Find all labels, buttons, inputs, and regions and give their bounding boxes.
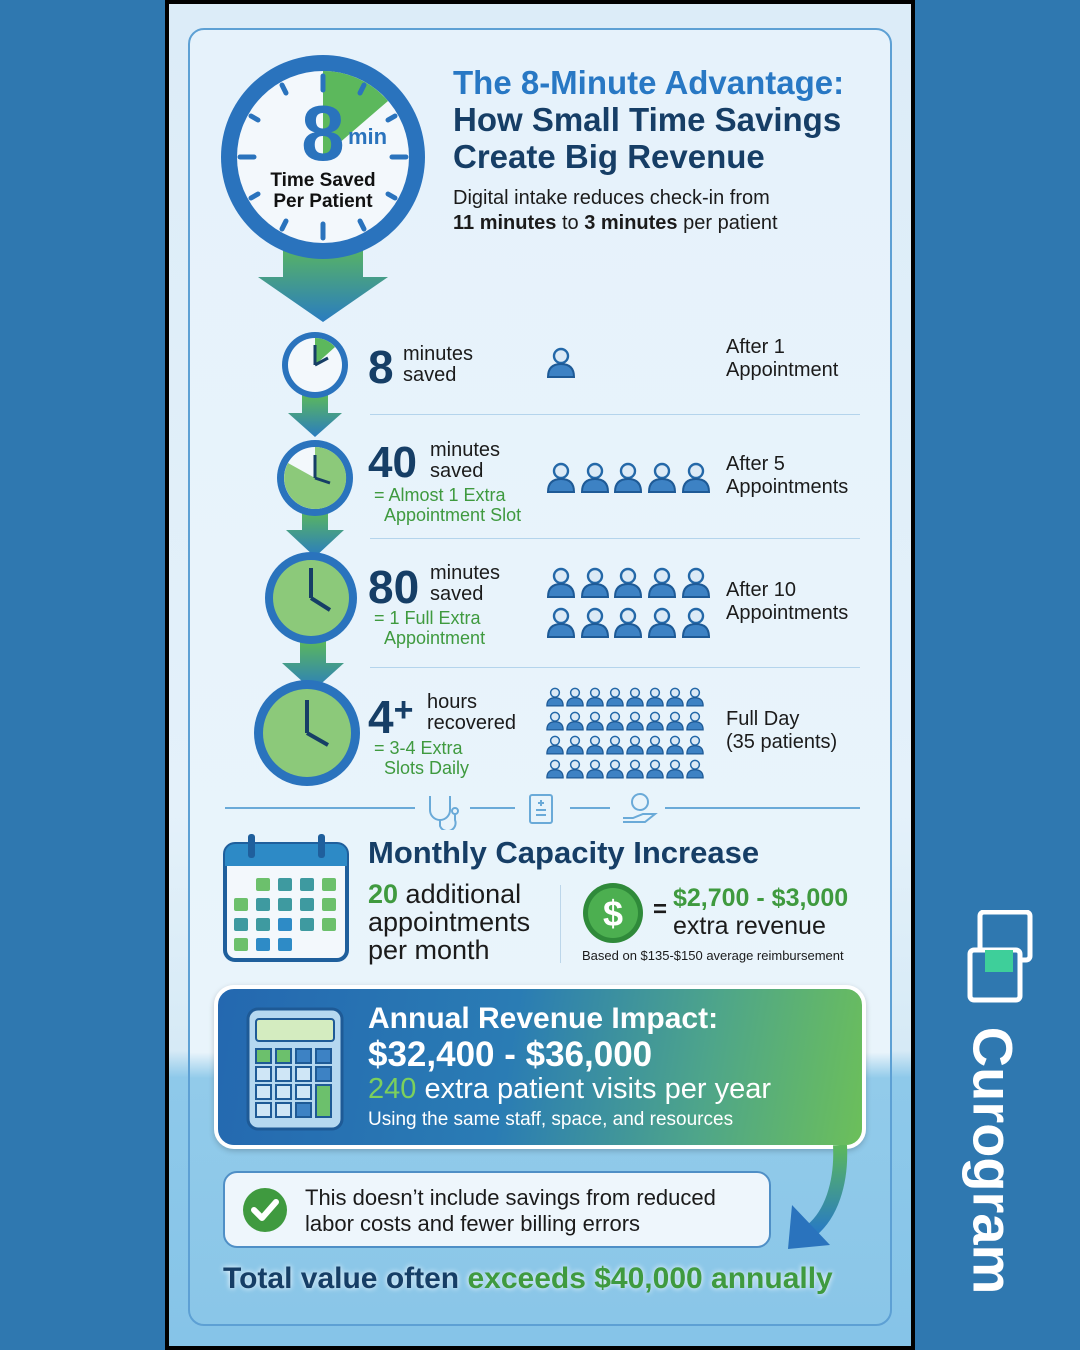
callout: note	[223, 1171, 771, 1248]
subtitle: Digital intake reduces check-in from	[453, 187, 770, 209]
monthly text	[368, 879, 530, 965]
text: Appointment	[384, 628, 485, 648]
text: saved	[403, 364, 456, 386]
revenue text: $2,700 - $3,000	[673, 884, 848, 912]
text: = 1 Full Extra	[374, 608, 481, 628]
title: Create Big Revenue	[453, 138, 765, 175]
icon: big clock 8 min	[221, 55, 425, 322]
text: After 1	[726, 336, 785, 358]
text: Appointment	[726, 359, 838, 381]
icon: check	[243, 1188, 287, 1232]
text: minutes	[430, 439, 500, 461]
text: saved	[430, 583, 483, 605]
arrow: curved to total	[788, 1145, 848, 1249]
text: = Almost 1 Extra	[374, 485, 506, 505]
annual text: $32,400 - $36,000	[368, 1035, 652, 1074]
card frame	[165, 0, 915, 1350]
monthly text: appointments	[368, 907, 530, 937]
icon: dollar coin: $	[603, 893, 623, 934]
row 4: 4+	[368, 691, 413, 743]
row 2: 40	[368, 438, 417, 487]
title: How Small Time Savings	[453, 101, 841, 138]
row 4 icons	[546, 688, 704, 778]
text: Full Day	[726, 708, 799, 730]
icon: big clock 8 min: min	[348, 124, 387, 149]
row 3: 80	[368, 561, 419, 613]
annual text	[368, 1002, 718, 1074]
text: (35 patients)	[726, 731, 837, 753]
icon: big clock 8 min: Time Saved	[270, 170, 376, 191]
text: Appointments	[726, 476, 848, 498]
text: saved	[430, 460, 483, 482]
icon: big clock 8 min: Per Patient	[273, 191, 373, 212]
title: The 8-Minute Advantage:	[453, 64, 844, 101]
icon divider row	[225, 793, 860, 830]
total value: Total value often exceeds $40,000 annually	[223, 1262, 833, 1295]
revenue text: extra revenue	[673, 912, 826, 940]
text: minutes	[430, 562, 500, 584]
text: Based on $135-$150 average reimbursement	[582, 948, 844, 963]
heading: monthly: Monthly Capacity Increase	[368, 835, 759, 870]
subtitle	[453, 187, 778, 234]
row 3 icons	[547, 568, 710, 638]
monthly text: per month	[368, 935, 490, 965]
icon: big clock 8 min: 8	[301, 89, 345, 177]
title	[453, 64, 844, 175]
revenue text	[673, 884, 848, 940]
annual text: Annual Revenue Impact:	[368, 1002, 718, 1035]
text: Appointments	[726, 602, 848, 624]
inner panel	[188, 28, 892, 1326]
timeline clocks and arrows	[254, 332, 360, 786]
text: hours	[427, 691, 477, 713]
row 1 icon	[547, 348, 575, 378]
text: = 3-4 Extra	[374, 738, 463, 758]
text: recovered	[427, 712, 516, 734]
callout: note: labor costs and fewer billing errors	[305, 1211, 640, 1236]
panel: annual revenue	[214, 985, 866, 1149]
panel: annual revenue: Using the same staff, space, and resources	[368, 1109, 733, 1130]
row 1 text: 8	[368, 341, 394, 393]
text: =	[653, 896, 667, 923]
icon: calendar	[223, 834, 349, 962]
logo: Curogram: Curogram	[962, 1027, 1024, 1294]
icon: dollar coin	[583, 883, 643, 943]
text: Slots Daily	[384, 758, 469, 778]
text: minutes	[403, 343, 473, 365]
text: After 5	[726, 453, 785, 475]
logo: Curogram	[962, 910, 1032, 1294]
icon: calculator	[246, 1008, 344, 1130]
text: Appointment Slot	[384, 505, 521, 525]
callout: note: This doesn’t include savings from reduced	[305, 1185, 716, 1210]
panel: annual revenue: 240 extra patient visits per year	[368, 1073, 771, 1105]
subtitle: 11 minutes to 3 minutes per patient	[453, 212, 778, 234]
text: After 10	[726, 579, 796, 601]
row 2 icons	[547, 462, 710, 493]
monthly text: 20 additional	[368, 879, 521, 909]
